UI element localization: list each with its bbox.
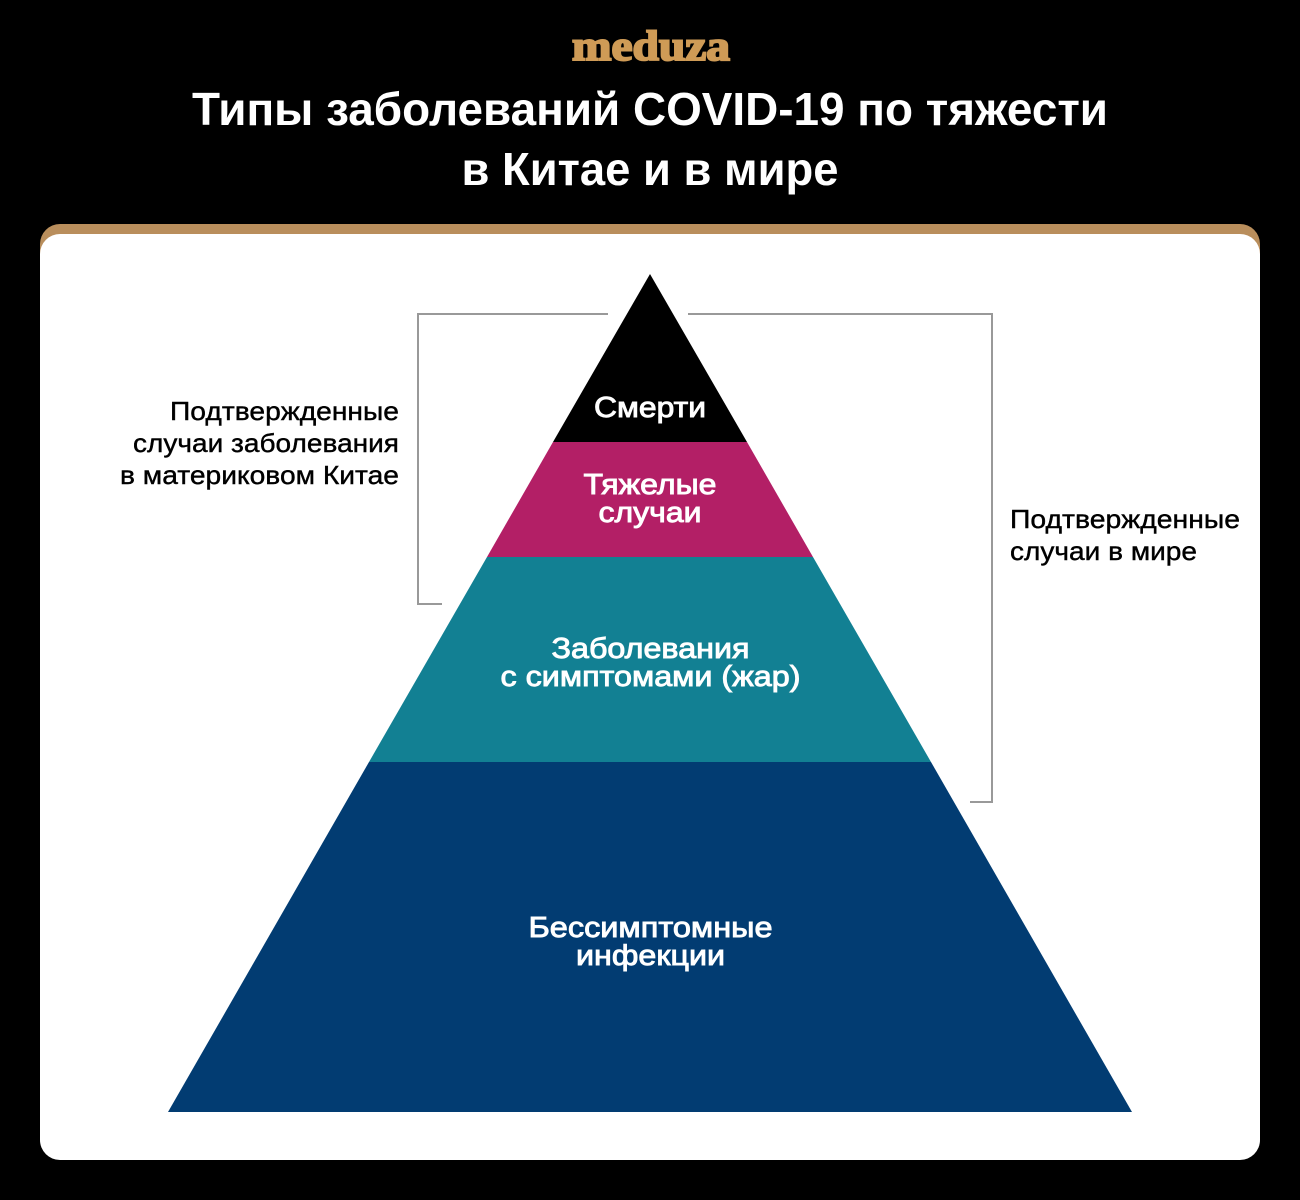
label: world cases: Подтвержденные	[1010, 504, 1240, 534]
title	[192, 83, 1108, 195]
label: mainland China cases: Подтвержденные	[170, 396, 399, 426]
label: world cases	[1010, 504, 1240, 566]
pyramid tier: asymptomatic: инфекции	[576, 940, 725, 972]
pyramid tier: deaths: Смерти	[594, 392, 706, 424]
bracket: mainland China	[418, 314, 608, 604]
pyramid	[168, 274, 1132, 1112]
label: world cases: случаи в мире	[1010, 536, 1197, 566]
pyramid tier: severe cases: случаи	[598, 497, 702, 529]
pyramid tier: asymptomatic	[168, 762, 1132, 1112]
label: mainland China cases: в материковом Китае	[120, 460, 399, 490]
pyramid tier: symptomatic: с симптомами (жар)	[500, 661, 800, 693]
label: mainland China cases: случаи заболевания	[133, 428, 399, 458]
pyramid tier: severe cases: Тяжелые	[584, 469, 716, 501]
pyramid tier: symptomatic: Заболевания	[552, 633, 750, 665]
bracket: world	[688, 314, 992, 802]
title: Типы заболеваний COVID-19 по тяжести	[192, 83, 1108, 135]
pyramid tier: severe cases	[487, 442, 813, 557]
label: mainland China cases	[120, 396, 399, 490]
panel: card	[40, 224, 1260, 1160]
logo: meduza: meduza	[572, 24, 730, 70]
pyramid tier: deaths	[553, 274, 747, 442]
pyramid tier: asymptomatic: Бессимптомные	[528, 912, 772, 944]
pyramid tier: symptomatic	[369, 557, 931, 762]
title: в Китае и в мире	[462, 143, 838, 195]
